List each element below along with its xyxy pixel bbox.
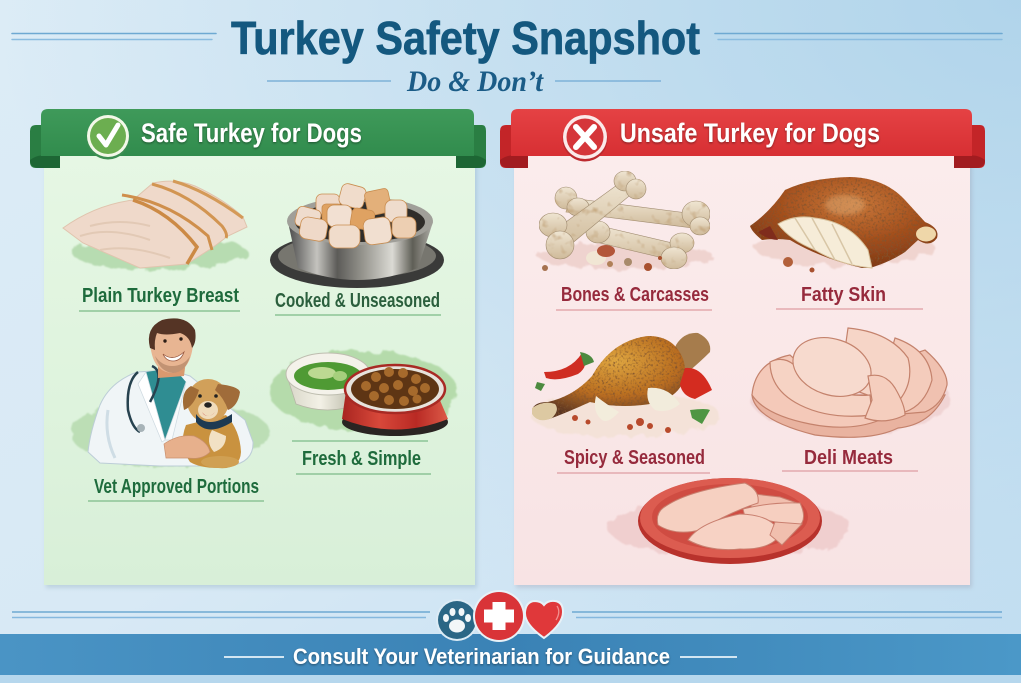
icon: heart (525, 601, 563, 638)
label: Spicy & Seasoned (564, 447, 705, 469)
label: Deli Meats (804, 447, 893, 469)
bones (539, 171, 710, 269)
item: plate of deli slices (608, 478, 852, 564)
divider lines (12, 612, 1002, 618)
icon: check mark (86, 115, 130, 160)
vet head (158, 360, 186, 378)
panel: safe turkey (30, 109, 486, 588)
panel: unsafe turkey (500, 109, 985, 588)
label: Bones & Carcasses (561, 284, 709, 306)
vet coat (88, 370, 253, 466)
vet hand (164, 436, 210, 458)
label (782, 447, 918, 471)
footer band (0, 634, 1021, 683)
drumstick (672, 333, 710, 372)
item: spicy and seasoned (530, 333, 720, 473)
ribbon: safe heading (30, 109, 486, 168)
label: Plain Turkey Breast (82, 285, 239, 307)
ribbon: unsafe heading (500, 109, 985, 168)
label: Fresh & Simple (302, 448, 421, 470)
item: cooked and unseasoned (270, 182, 444, 315)
kibble chunks (294, 182, 416, 248)
dog (183, 415, 241, 468)
icon: cross mark (562, 115, 608, 162)
icon: paw (436, 599, 478, 641)
footer text: Consult Your Veterinarian for Guidance (293, 644, 670, 669)
item: plain turkey breast (63, 181, 248, 311)
icon: medical cross (473, 590, 525, 642)
title: Turkey Safety Snapshot (231, 12, 700, 64)
ribbon text: Unsafe Turkey for Dogs (620, 118, 880, 148)
item: fatty skin (750, 177, 938, 309)
item: fresh and simple (269, 351, 457, 474)
pepper and leaf (544, 353, 585, 379)
subtitle: Do & Don’t (406, 65, 545, 98)
tomato and garlic (680, 368, 712, 399)
label: Fatty Skin (801, 284, 886, 306)
label (292, 441, 431, 474)
ribbon text: Safe Turkey for Dogs (141, 118, 362, 148)
crumbs (542, 245, 662, 271)
label: Vet Approved Portions (94, 476, 259, 498)
item: bones and carcasses (537, 171, 713, 310)
red bowl (342, 408, 448, 436)
label: Cooked & Unseasoned (275, 290, 440, 312)
leaf and spice (690, 409, 710, 424)
item: vet approved portions (70, 318, 270, 501)
item: deli meats (750, 328, 950, 471)
